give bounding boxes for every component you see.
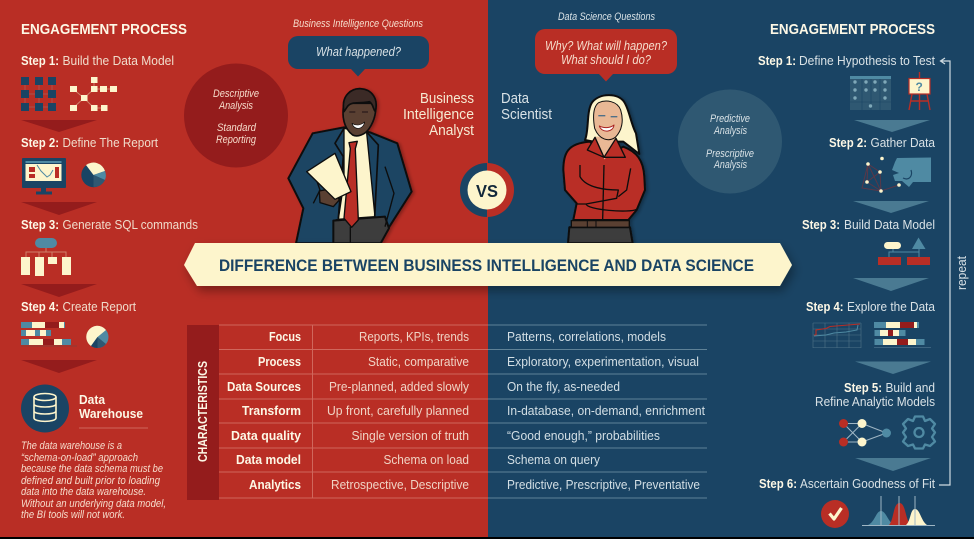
icon: distribution curves <box>862 496 935 526</box>
label: data scientist: Data <box>501 91 530 107</box>
figure: data scientist <box>563 95 645 243</box>
icon: easel with question mark: ? <box>916 80 923 94</box>
row: analytics: Predictive, Prescriptive, Preventative <box>507 478 700 492</box>
step 3 label: Generate SQL commands <box>62 218 198 232</box>
icon: sql flow chart <box>21 238 71 276</box>
arrow: right step 2 to step 3 <box>853 201 929 213</box>
badge: versus: VS <box>476 181 498 201</box>
characteristics side bar: CHARACTERISTICS <box>195 361 210 462</box>
circle: descriptive analysis and standard reporting: Standard <box>217 122 257 134</box>
step 3 label right: Build Data Model <box>844 218 935 232</box>
data warehouse description: “schema-on-load” approach <box>21 452 138 464</box>
arrow: step 3 to step 4 <box>21 284 97 297</box>
heading: engagement process left: ENGAGEMENT PROCESS <box>21 21 187 38</box>
row: analytics: Analytics <box>249 478 301 492</box>
repeat loop arrow <box>939 58 950 485</box>
banner: main title <box>184 243 792 286</box>
label: business intelligence analyst <box>403 91 474 139</box>
arrow: right step 5 to step 6 <box>855 458 931 471</box>
circle: predictive and prescriptive analysis: Analysis <box>713 125 747 137</box>
row: data model: Data model <box>236 453 301 467</box>
circle: predictive and prescriptive analysis: Predictive <box>710 113 750 125</box>
circle: descriptive analysis and standard reporting: Reporting <box>216 134 257 146</box>
step 5 label right: Build and <box>886 381 935 395</box>
row: data quality: “Good enough,” probabilities <box>507 429 660 443</box>
row: analytics <box>249 478 700 492</box>
arrow: step 2 to step 3 <box>21 202 97 215</box>
panel: business intelligence background <box>0 0 488 537</box>
label: data scientist: Scientist <box>501 107 552 123</box>
row: data quality <box>231 429 660 443</box>
icon: data grid <box>21 77 56 111</box>
circle: descriptive analysis and standard reporting: Descriptive <box>213 88 259 100</box>
row: analytics: Retrospective, Descriptive <box>331 478 469 492</box>
row: data model <box>236 453 601 467</box>
step 4 label <box>21 300 136 314</box>
panel: data science background <box>488 0 974 537</box>
speech bubble: why what will happen: What should I do? <box>561 52 652 67</box>
step 1 label right: Define Hypothesis to Test <box>799 54 936 68</box>
speech bubble: why what will happen <box>535 29 677 82</box>
icon: gear <box>903 416 935 448</box>
circle: predictive and prescriptive analysis <box>678 90 782 194</box>
row: transform: In-database, on-demand, enrichment <box>507 404 705 418</box>
step 5 label right <box>815 381 935 409</box>
circle: descriptive analysis and standard reporting: Analysis <box>218 100 253 112</box>
step 1 label: Step 1: <box>21 54 59 68</box>
icon: data warehouse database <box>21 384 69 432</box>
icon: stacked bars right <box>874 322 931 348</box>
row: process: Process <box>258 355 301 369</box>
icon: neural network <box>839 419 891 446</box>
step 4 label right: Step 4: <box>806 300 844 314</box>
icon: check mark badge <box>821 500 849 528</box>
data warehouse description: data into the data warehouse. <box>21 486 146 498</box>
data warehouse label: Data <box>79 392 106 407</box>
data warehouse description: The data warehouse is a <box>21 440 122 452</box>
arrow: step 1 to step 2 <box>21 120 97 132</box>
right engagement process column <box>758 21 969 528</box>
step 2 label right: Step 2: <box>829 136 867 150</box>
step 4 label: Create Report <box>62 300 136 314</box>
row: process: Static, comparative <box>368 355 469 369</box>
data warehouse description: the BI tools will not work. <box>21 509 125 521</box>
arrow: step 4 to data warehouse <box>21 360 97 373</box>
row: focus: Focus <box>269 330 301 344</box>
step 4 label: Step 4: <box>21 300 59 314</box>
banner: main title: DIFFERENCE BETWEEN BUSINESS INTELLIGENCE AND DATA SCIENCE <box>219 257 754 275</box>
data warehouse description: because the data schema must be <box>21 463 163 475</box>
icon: data model shapes <box>878 238 930 265</box>
data warehouse label <box>79 392 143 421</box>
row: data quality: Data quality <box>231 429 301 443</box>
step 4 label right <box>806 300 935 314</box>
icon: data model nodes <box>70 77 117 111</box>
badge: versus <box>460 163 514 217</box>
arrow: right step 1 to step 2 <box>854 120 930 132</box>
icon: easel with question mark <box>909 72 930 110</box>
step 2 label: Step 2: <box>21 136 59 150</box>
figure: business intelligence analyst <box>288 89 412 243</box>
row: data sources <box>227 380 620 394</box>
row: data sources: Data Sources <box>227 380 301 394</box>
label: business intelligence analyst: Business <box>420 91 474 107</box>
label: data science questions: Data Science Questions <box>558 11 655 23</box>
speech bubble: what happened: What happened? <box>316 44 402 59</box>
data warehouse label: Warehouse <box>79 406 143 421</box>
step 2 label: Define The Report <box>62 136 158 150</box>
step 6 label right: Ascertain Goodness of Fit <box>800 477 935 491</box>
data warehouse description: defined and built prior to loading <box>21 475 161 487</box>
circle: predictive and prescriptive analysis: Analysis <box>713 159 747 171</box>
table row lines <box>219 325 707 498</box>
row: data sources: Pre-planned, added slowly <box>329 380 470 394</box>
icon: monitor dashboard <box>22 158 66 194</box>
row: focus <box>269 330 666 344</box>
label: repeat: repeat <box>955 256 969 290</box>
icon: network and hand <box>862 157 931 193</box>
arrow: right step 3 to step 4 <box>853 278 929 291</box>
label: business intelligence analyst: Intelligence <box>403 107 474 123</box>
table: characteristics comparison <box>187 325 707 500</box>
icon: calendar data table <box>850 76 891 110</box>
characteristics side bar <box>187 325 219 500</box>
step 2 label <box>21 136 158 150</box>
step 4 label right: Explore the Data <box>847 300 935 314</box>
step 3 label: Step 3: <box>21 218 59 232</box>
icon: small pie chart <box>86 326 108 348</box>
row: process <box>258 355 699 369</box>
step 2 label right <box>829 136 935 150</box>
arrow: right step 4 to step 5 <box>855 362 931 374</box>
speech bubble: why what will happen: Why? What will happen? <box>545 38 668 53</box>
row: data sources: On the fly, as-needed <box>507 380 620 394</box>
label: business intelligence analyst: Analyst <box>429 123 474 139</box>
icon: stacked bars <box>21 322 77 346</box>
label: data scientist <box>501 91 552 123</box>
row: focus: Patterns, correlations, models <box>507 330 666 344</box>
row: focus: Reports, KPIs, trends <box>359 330 469 344</box>
step 6 label right: Step 6: <box>759 477 797 491</box>
step 3 label right: Step 3: <box>802 218 840 232</box>
row: transform <box>242 404 705 418</box>
row: data model: Schema on load <box>384 453 469 467</box>
speech bubble: what happened <box>288 36 429 76</box>
icon: line chart <box>813 323 861 348</box>
data warehouse description: Without an underlying data model, <box>21 498 166 510</box>
step 1 label right: Step 1: <box>758 54 796 68</box>
circle: predictive and prescriptive analysis: Prescriptive <box>706 148 754 160</box>
heading: engagement process right: ENGAGEMENT PROCESS <box>770 21 935 38</box>
row: transform: Up front, carefully planned <box>327 404 469 418</box>
step 5 label right: Step 5: <box>844 381 882 395</box>
step 1 label: Build the Data Model <box>62 54 174 68</box>
row: data quality: Single version of truth <box>352 429 469 443</box>
circle: descriptive analysis and standard reporting <box>184 64 288 168</box>
step 3 label right <box>802 218 935 232</box>
data warehouse description <box>21 440 166 521</box>
row: process: Exploratory, experimentation, visual <box>507 355 699 369</box>
left engagement process column <box>21 21 198 521</box>
row: data model: Schema on query <box>507 453 601 467</box>
step 5 label right: Refine Analytic Models <box>815 395 935 409</box>
icon: pie chart <box>81 163 106 187</box>
label: business intelligence questions: Business Intelligence Questions <box>293 18 423 30</box>
row: transform: Transform <box>242 404 301 418</box>
step 2 label right: Gather Data <box>870 136 935 150</box>
